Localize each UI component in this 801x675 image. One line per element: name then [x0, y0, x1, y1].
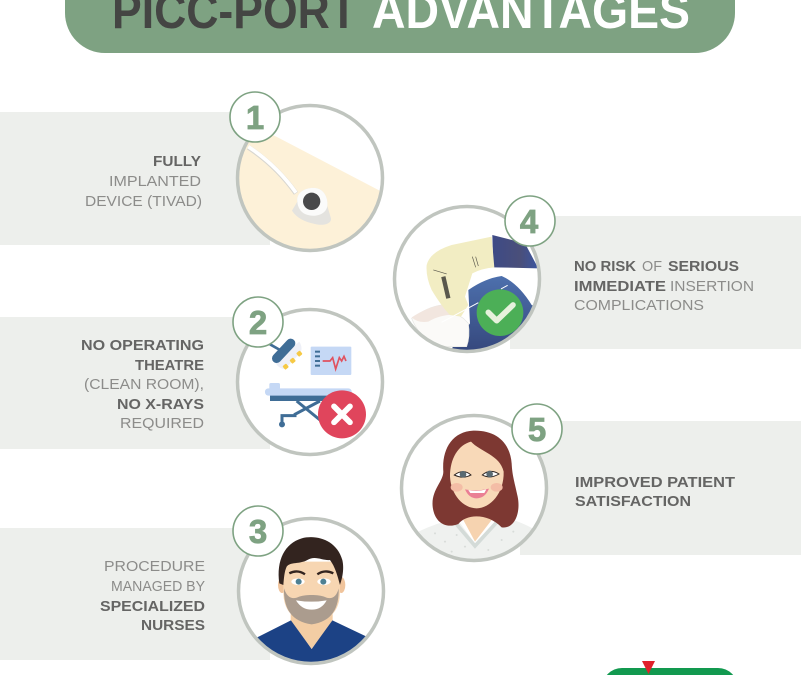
panel text 5: SATISFACTION	[575, 493, 691, 510]
panel: specialized nurses	[0, 528, 270, 660]
badge 5: 5	[528, 411, 546, 448]
icon: operating room crossed out	[238, 310, 382, 454]
panel text 4: COMPLICATIONS	[574, 297, 704, 314]
panel text 3: MANAGED BY	[111, 578, 205, 595]
panel text 4: OF	[642, 258, 662, 275]
panel: no risk	[510, 216, 801, 349]
panel text 1: IMPLANTED	[109, 173, 201, 190]
panel text 4: IMMEDIATE	[574, 278, 666, 295]
icon: implanted port	[236, 104, 384, 252]
panel text 2: NO OPERATING	[81, 337, 204, 354]
badge 1: 1	[246, 99, 264, 136]
panel text 2: (CLEAN ROOM),	[84, 376, 204, 393]
icon: nurse portrait	[238, 518, 384, 665]
panel: patient satisfaction	[520, 421, 801, 555]
panel: fully implanted device	[0, 112, 270, 245]
panel text 4: NO RISK	[574, 258, 636, 275]
panel text 3: PROCEDURE	[104, 558, 205, 575]
icon: patient portrait	[402, 416, 546, 560]
panel text 4: INSERTION	[670, 278, 754, 295]
badge 5	[512, 404, 562, 454]
icon: gloved hand inserting catheter	[394, 206, 545, 353]
bed	[265, 383, 352, 427]
panel: no operating theatre	[0, 317, 270, 449]
panel text 3: NURSES	[141, 617, 205, 634]
logo fragment	[602, 661, 738, 675]
panel text 2: REQUIRED	[120, 415, 204, 432]
badge 3: 3	[249, 513, 267, 550]
panel text 5: IMPROVED PATIENT	[575, 474, 735, 491]
monitor	[311, 347, 351, 375]
lamp	[270, 342, 303, 370]
panel text 3: SPECIALIZED	[100, 598, 205, 615]
panel text 1: DEVICE (TIVAD)	[85, 193, 202, 210]
badge 1	[230, 92, 280, 142]
panel text 2: NO X-RAYS	[117, 396, 204, 413]
red cross badge	[318, 390, 366, 438]
badge 4	[505, 196, 555, 246]
panel text 2: THEATRE	[135, 357, 204, 374]
panel text 4: SERIOUS	[668, 258, 739, 275]
badge 3	[233, 506, 283, 556]
badge 2: 2	[249, 304, 267, 341]
badge 4: 4	[520, 203, 539, 240]
badge 2	[233, 297, 283, 347]
panel text 1: FULLY	[153, 153, 201, 170]
title banner	[65, 0, 735, 53]
